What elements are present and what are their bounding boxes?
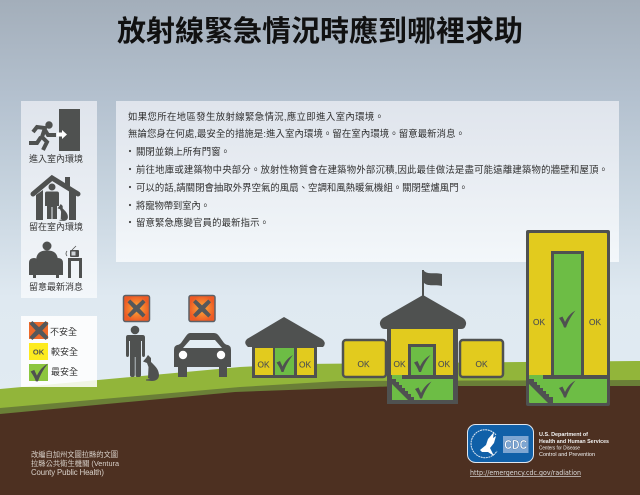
- credit text: 改編自加州文圖拉縣的文圖: [31, 450, 118, 459]
- legend: safer: 較安全: [51, 346, 78, 357]
- legend: safer: [29, 343, 78, 360]
- instruction text: 關閉並鎖上所有門窗。: [136, 146, 230, 157]
- warning icon: person outside: [124, 296, 150, 322]
- credit text: [31, 450, 120, 477]
- label: stay tuned: 留意最新消息: [29, 281, 83, 292]
- icon: person: [126, 326, 145, 377]
- small house: OK: [299, 360, 311, 370]
- large building with basement: [380, 270, 466, 404]
- agency text: Centers for Disease: [539, 446, 580, 452]
- icon: get inside: [29, 109, 80, 151]
- right wing building: [460, 340, 503, 377]
- panel: instructions: [116, 101, 619, 262]
- instruction text: 留意緊急應變官員的最新指示。: [136, 217, 269, 228]
- large building with basement: OK: [438, 359, 450, 369]
- logo: CDC: [468, 424, 534, 462]
- instruction text: 無論您身在何處,最安全的措施是:進入室內環境。留在室內環境。留意最新消息。: [128, 128, 465, 139]
- url: http://emergency.cdc.gov/radiation: [470, 469, 581, 477]
- agency text: [539, 432, 609, 458]
- icon: stay inside: [33, 177, 78, 221]
- panel: actions: [21, 101, 97, 298]
- credit text: 拉縣公共衛生機關 (Ventura: [31, 459, 120, 468]
- instruction text: [128, 111, 608, 228]
- agency text: Health and Human Services: [539, 439, 609, 445]
- instruction text: 將寵物帶到室內。: [136, 200, 210, 211]
- logo: CDC: CDC: [504, 438, 527, 452]
- legend: safest: 最安全: [51, 366, 78, 377]
- tall tower with basement: OK: [589, 317, 601, 327]
- legend: not safe: 不安全: [50, 326, 77, 337]
- instruction text: 可以的話,請關閉會抽取外界空氣的風扇、空調和風熱暖氣機組。關閉壁爐風門。: [136, 182, 468, 193]
- small house: [245, 317, 325, 378]
- small house: OK: [258, 360, 270, 370]
- right wing building: OK: [476, 359, 488, 369]
- icon: car: [174, 333, 231, 377]
- panel: legend: [21, 316, 97, 387]
- left wing building: OK: [358, 359, 370, 369]
- label: get inside: 進入室內環境: [29, 153, 83, 164]
- tall tower with basement: [526, 230, 610, 406]
- ground: [0, 361, 640, 495]
- agency text: U.S. Department of: [539, 432, 588, 438]
- label: stay inside: 留在室內環境: [29, 221, 83, 232]
- icon: stay tuned: [29, 242, 82, 278]
- icon: dog: [143, 355, 159, 381]
- tall tower with basement: OK: [533, 317, 545, 327]
- left wing building: [343, 340, 386, 377]
- legend: safer: OK: [33, 348, 45, 356]
- agency text: Control and Prevention: [539, 452, 595, 458]
- instruction text: 如果您所在地區發生放射線緊急情況,應立即進入室內環境。: [128, 111, 384, 122]
- instruction text: 前往地庫或建築物中央部分。放射性物質會在建築物外部沉積,因此最佳做法是盡可能遠離建築物的牆壁和屋頂。: [136, 164, 608, 175]
- warning icon: car: [189, 296, 215, 322]
- credit text: County Public Health): [31, 468, 104, 477]
- large building with basement: OK: [394, 359, 406, 369]
- title: 放射線緊急情況時應到哪裡求助: [117, 14, 523, 48]
